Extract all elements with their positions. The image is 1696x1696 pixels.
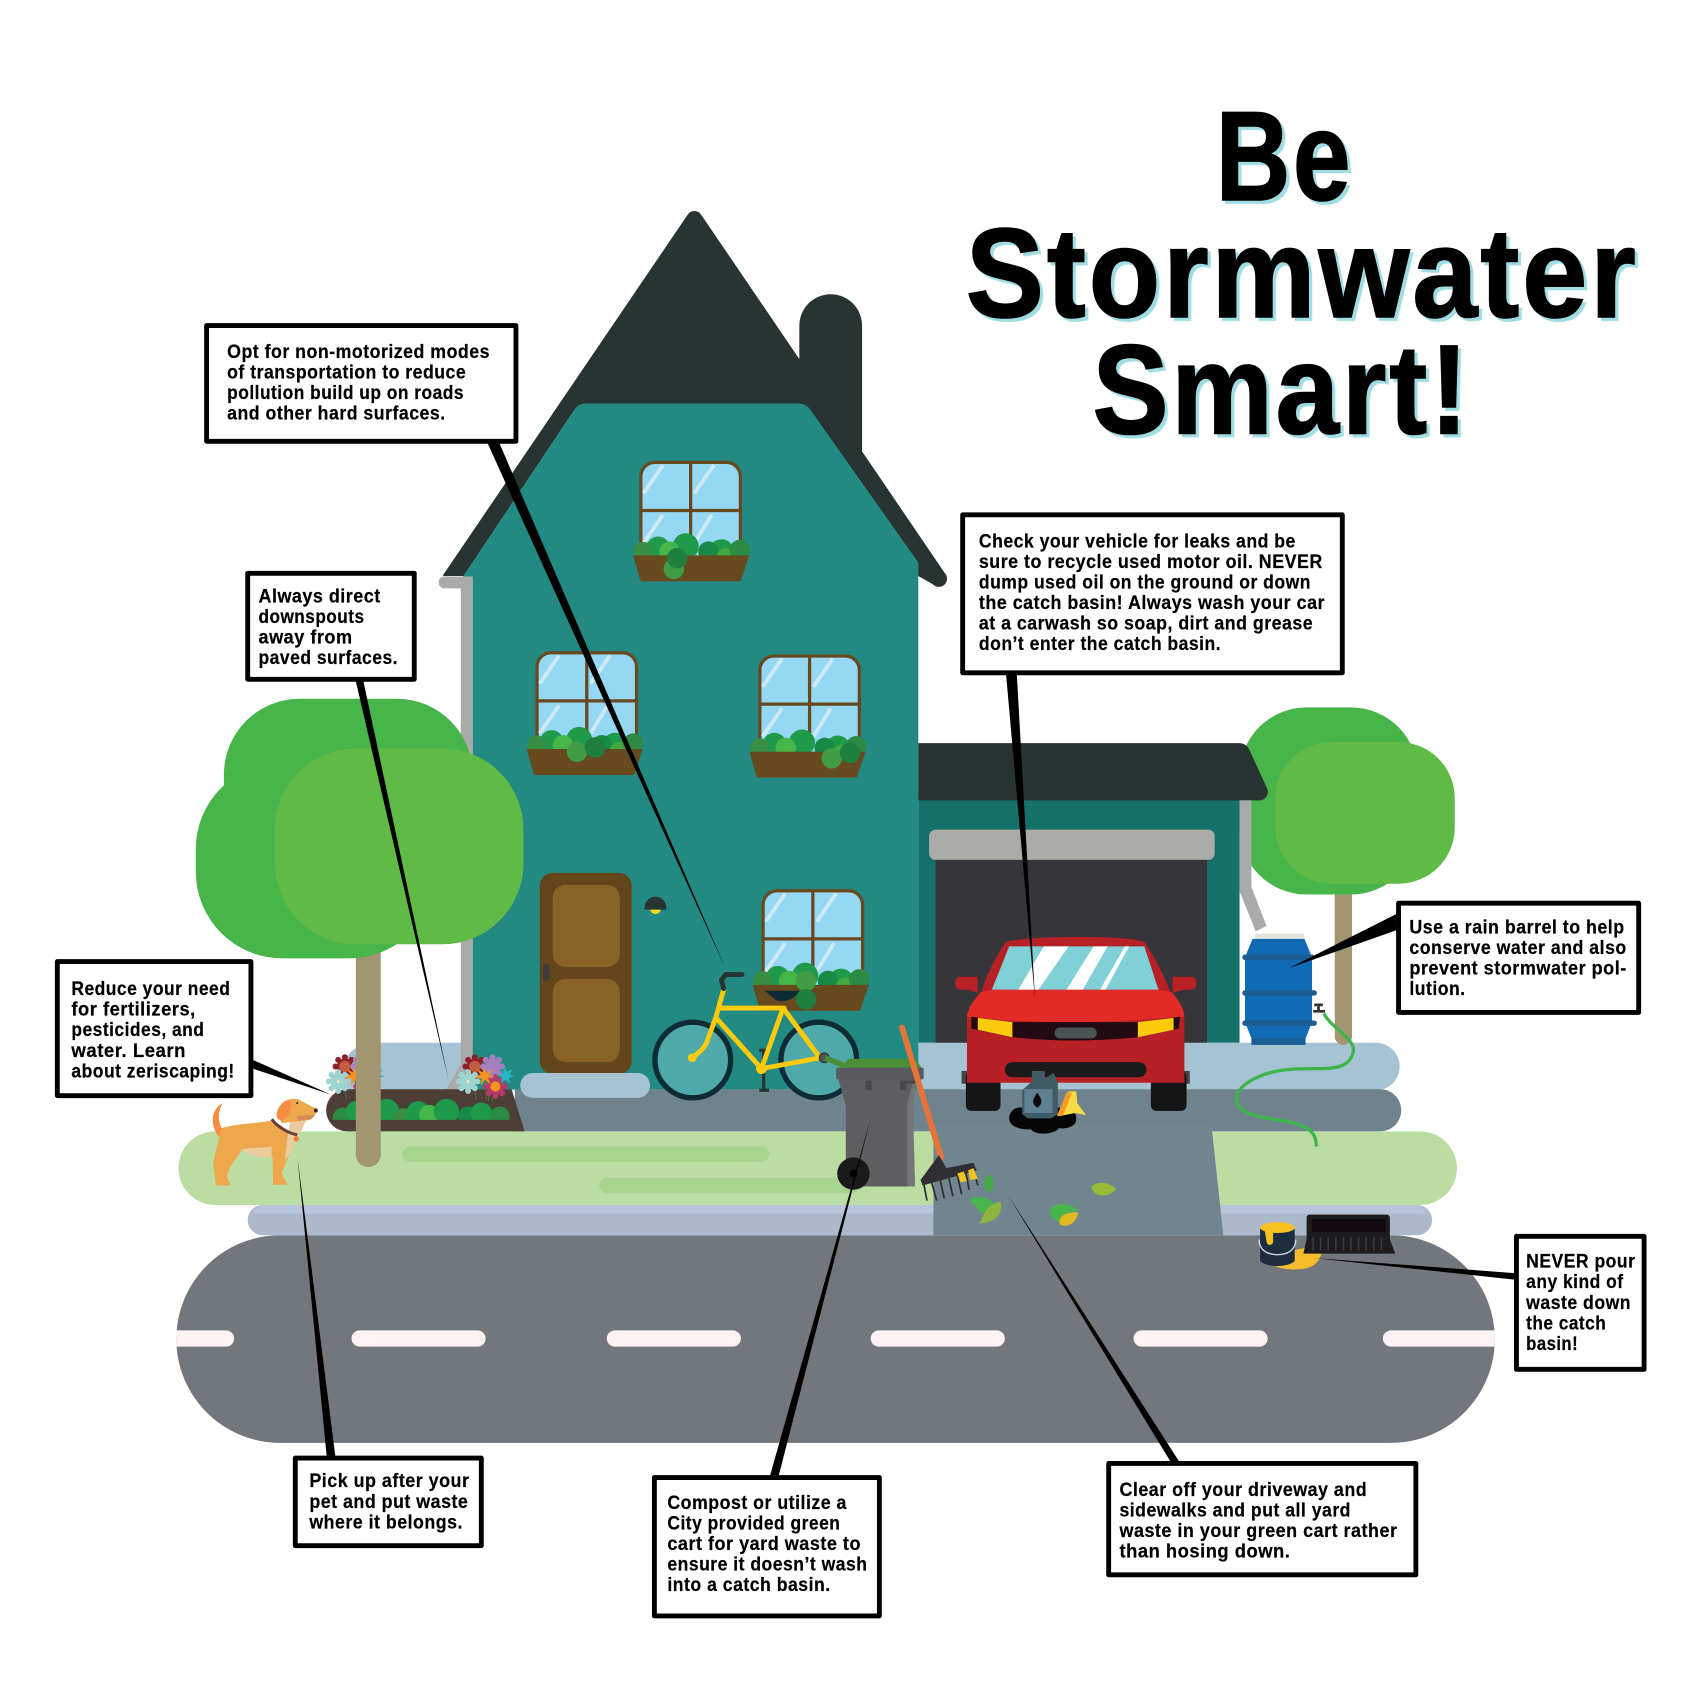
garden plants and flowers	[326, 1054, 514, 1120]
callout: downspouts: away from	[259, 627, 353, 649]
car tires	[966, 1071, 1187, 1111]
front walkway	[515, 1089, 1401, 1131]
cabin	[979, 937, 1174, 1001]
leaves	[969, 1174, 1116, 1226]
callout: non-motorized transportation: and other hard surfaces.	[227, 403, 446, 425]
chimney	[799, 294, 862, 476]
callout: pet waste: where it belongs.	[308, 1511, 463, 1533]
garage door	[936, 854, 1207, 1043]
paint can	[1259, 1222, 1324, 1269]
garage downspout	[1240, 800, 1267, 931]
gutter and downspout	[439, 577, 473, 1097]
callout: compost: ensure it doesn’t wash	[667, 1554, 867, 1576]
callout: compost: Compost or utilize a	[667, 1492, 847, 1514]
window lower	[753, 891, 870, 1010]
garage roof	[918, 743, 1268, 800]
callout: rain barrel: prevent stormwater pol-	[1409, 958, 1627, 980]
leader: rain barrel	[1289, 914, 1396, 968]
flowers right	[456, 1054, 515, 1102]
window middle right	[750, 656, 866, 777]
dog head	[277, 1099, 317, 1123]
callout: zeriscaping: Reduce your need	[71, 978, 230, 1000]
callout: compost	[654, 1478, 879, 1616]
callout: rain barrel: Use a rain barrel to help	[1409, 916, 1625, 938]
curb	[248, 1205, 1432, 1235]
tail	[213, 1103, 224, 1136]
driveway	[933, 1125, 1223, 1235]
callout: zeriscaping: about zeriscaping!	[71, 1060, 235, 1082]
callout: compost: City provided green	[667, 1512, 840, 1534]
door	[540, 873, 632, 1074]
leader: pet waste	[297, 1157, 335, 1456]
callout: vehicle maintenance: don’t enter the catch basin.	[979, 633, 1221, 655]
leader: driveway	[1008, 1195, 1179, 1461]
bicycle	[655, 975, 857, 1098]
callout: clear driveway: than hosing down.	[1119, 1541, 1290, 1563]
title: Stormwater	[966, 202, 1639, 345]
callout: downspouts: downspouts	[259, 606, 365, 628]
callout: vehicle maintenance: sure to recycle used motor oil. NEVER	[979, 551, 1323, 573]
callout: clear driveway: Clear off your driveway and	[1119, 1479, 1367, 1501]
leader: downspouts	[356, 681, 449, 1082]
leader: compost	[770, 1118, 871, 1475]
oil spill, jug and funnel	[1009, 1071, 1086, 1134]
window top	[634, 462, 750, 581]
callout: compost: cart for yard waste to	[667, 1533, 861, 1555]
callout: clear driveway: waste in your green cart rather	[1119, 1520, 1397, 1542]
callout: non-motorized transportation: of transportation to reduce	[227, 362, 466, 384]
shrubs	[332, 1098, 510, 1120]
garage header	[929, 830, 1215, 860]
callout: catch basin: any kind of	[1526, 1271, 1624, 1293]
callout: vehicle maintenance: the catch basin! Always wash your car	[979, 592, 1325, 614]
callout: catch basin: the catch	[1526, 1312, 1606, 1334]
callout: zeriscaping: for fertilizers,	[71, 999, 196, 1021]
road	[176, 1235, 1495, 1443]
dog body	[213, 1120, 292, 1185]
callout: rain barrel: conserve water and also	[1409, 937, 1627, 959]
callout: zeriscaping: pesticides, and	[71, 1019, 204, 1041]
callout: catch basin: NEVER pour	[1526, 1251, 1635, 1273]
callout: downspouts: paved surfaces.	[259, 647, 398, 669]
dog	[213, 1099, 318, 1185]
callout: downspouts	[248, 573, 414, 679]
callout: clear driveway: sidewalks and put all yard	[1119, 1499, 1351, 1521]
rain barrel	[1245, 933, 1325, 1045]
callout: vehicle maintenance: dump used oil on the ground or down	[979, 571, 1311, 593]
headlights	[978, 1018, 1174, 1037]
title: Smart!	[1092, 319, 1471, 462]
callout: catch basin	[1516, 1236, 1644, 1369]
mulch bed	[326, 1089, 525, 1131]
callout: non-motorized transportation: pollution build up on roads	[227, 382, 464, 404]
title	[966, 85, 1639, 462]
collar	[272, 1119, 297, 1135]
hood	[967, 990, 1184, 1022]
callout: downspouts: Always direct	[259, 585, 381, 607]
callout: non-motorized transportation	[207, 326, 516, 441]
right tree	[1240, 707, 1455, 1045]
callout: zeriscaping: water. Learn	[70, 1040, 186, 1062]
lawn	[178, 1131, 1457, 1205]
callout: vehicle maintenance	[963, 515, 1342, 673]
sidewalk	[342, 1043, 1400, 1090]
leader: zeriscaping	[253, 1060, 331, 1095]
callout: vehicle maintenance: at a carwash so soap, dirt and grease	[979, 613, 1313, 635]
doorstep	[520, 1073, 650, 1098]
callout: compost: into a catch basin.	[667, 1574, 831, 1596]
callout: clear driveway	[1109, 1463, 1416, 1575]
callout: zeriscaping	[57, 962, 251, 1096]
ear	[276, 1100, 292, 1120]
callout: pet waste: pet and put waste	[309, 1491, 468, 1513]
leader: catch basin	[1313, 1258, 1514, 1280]
garage	[918, 743, 1268, 1043]
mirrors	[955, 977, 1196, 993]
callout: non-motorized transportation: Opt for non-motorized modes	[227, 341, 490, 363]
garden hose	[1236, 1013, 1353, 1147]
car body	[967, 1015, 1184, 1083]
main roof	[443, 212, 946, 586]
title: Be	[1216, 85, 1353, 228]
red car	[955, 937, 1196, 1111]
porch lamp	[645, 897, 666, 914]
callout: pet waste: Pick up after your	[309, 1470, 469, 1492]
flowers left	[326, 1054, 385, 1102]
left tree	[196, 699, 524, 1167]
green cart	[825, 1058, 924, 1190]
leader: non-motorized	[487, 441, 726, 969]
rake	[902, 1028, 978, 1201]
callout: pet waste	[295, 1458, 481, 1546]
badge	[1055, 1028, 1097, 1038]
callout: vehicle maintenance: Check your vehicle for leaks and be	[979, 530, 1296, 552]
lower intake	[1005, 1062, 1147, 1077]
callout: catch basin: waste down	[1525, 1292, 1631, 1314]
callout: catch basin: basin!	[1526, 1333, 1578, 1355]
grille	[971, 1017, 1180, 1041]
callout: rain barrel: lution.	[1409, 978, 1466, 1000]
windshield	[992, 946, 1158, 990]
house wall	[463, 403, 918, 1089]
bumper sides	[962, 1071, 1190, 1084]
leader: vehicle	[1006, 673, 1035, 1001]
catch basin	[1303, 1215, 1395, 1254]
belly	[242, 1146, 272, 1157]
house	[439, 212, 946, 1098]
callout: rain barrel	[1399, 903, 1639, 1012]
window middle left	[527, 653, 644, 774]
